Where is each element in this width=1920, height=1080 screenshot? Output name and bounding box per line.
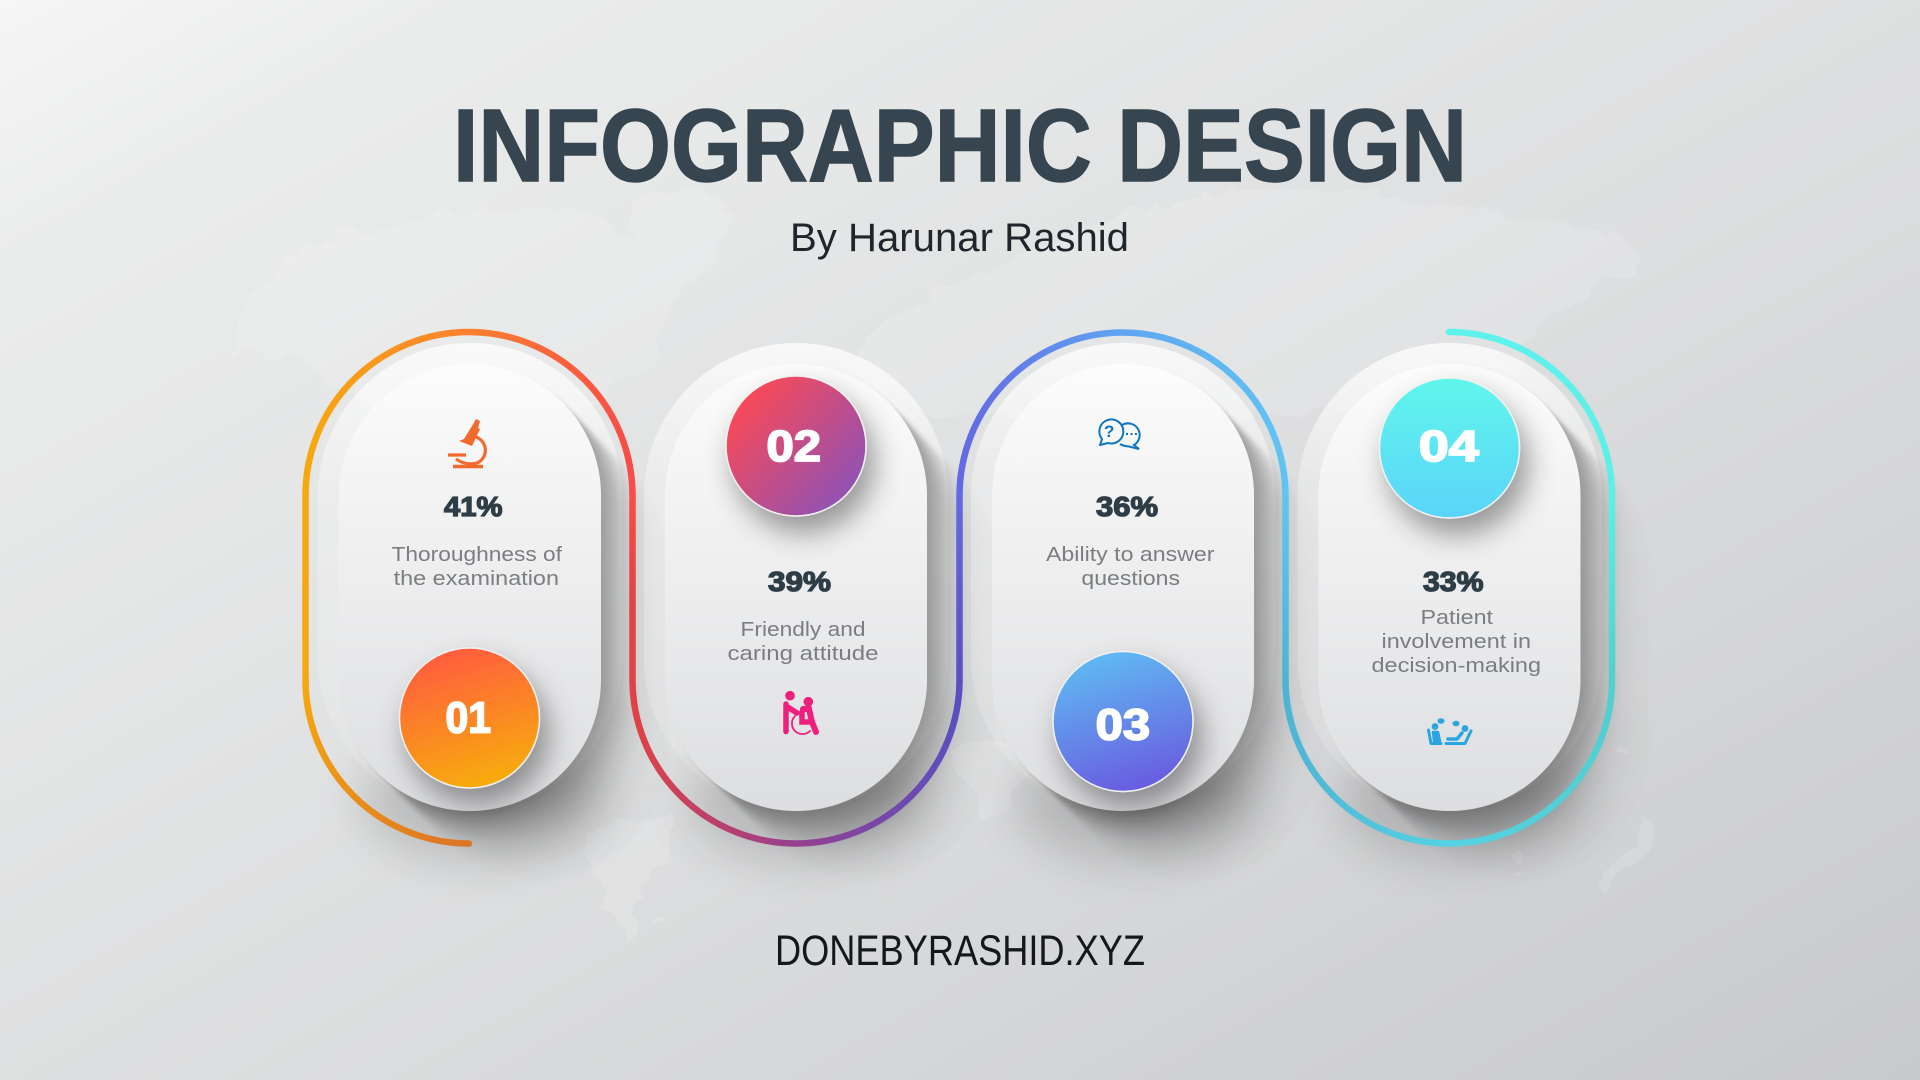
description: ability: questions: [1081, 568, 1180, 590]
stat: 41%: 41%: [444, 491, 503, 522]
footer url: DONEBYRASHID.XYZ: [775, 927, 1145, 975]
description: friendly: [728, 619, 878, 665]
icon: speech bubbles: ?: [1104, 422, 1114, 441]
description: patient: decision-making: [1372, 655, 1541, 677]
number badge 03: [1053, 652, 1193, 792]
number badge 04: [1380, 378, 1520, 518]
number badge 01: [400, 648, 540, 788]
number badge 03: 03: [1096, 700, 1150, 750]
icon: microscope: [448, 419, 485, 466]
icon: wheelchair carer: [785, 691, 816, 734]
stat: 33%: 33%: [1423, 566, 1484, 597]
description: patient: [1372, 607, 1541, 677]
description: friendly: caring attitude: [728, 643, 878, 665]
description: thoroughness: the examination: [394, 568, 559, 590]
number badge 02: 02: [766, 422, 821, 471]
number badge 02: [726, 376, 866, 516]
stat: 39%: 39%: [768, 566, 831, 597]
number badge 01: 01: [446, 694, 491, 742]
panel: card 01: [318, 343, 669, 879]
panel: card 04: [1298, 343, 1648, 879]
title: INFOGRAPHIC DESIGN: [453, 88, 1467, 203]
number badge 04: 04: [1419, 422, 1479, 471]
description: thoroughness: [392, 544, 562, 590]
ring: continuous gradient line: [306, 332, 1612, 844]
description: thoroughness: Thoroughness of: [392, 544, 562, 566]
description: patient: involvement in: [1382, 631, 1531, 653]
panel: card 03: [971, 343, 1322, 879]
icon: speech bubbles: [1099, 419, 1140, 449]
description: ability: [1046, 544, 1215, 590]
icon: therapy session: [1428, 718, 1471, 744]
description: ability: Ability to answer: [1046, 544, 1215, 566]
description: patient: Patient: [1420, 607, 1494, 629]
world map watermark: [233, 189, 1660, 945]
subtitle: By Harunar Rashid: [790, 216, 1129, 260]
description: friendly: Friendly and: [740, 619, 866, 641]
panel: card 02: [644, 343, 995, 879]
stat: 36%: 36%: [1096, 491, 1158, 522]
